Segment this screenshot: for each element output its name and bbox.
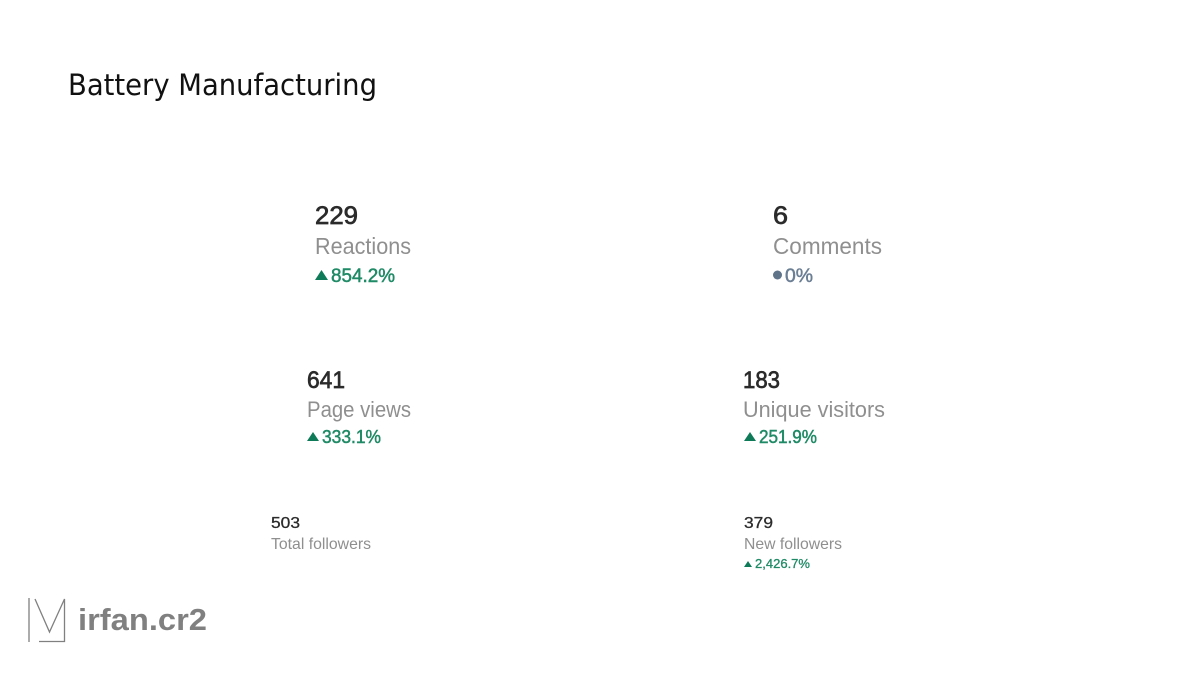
metric: total followers xyxy=(271,515,371,553)
metric: reactions: Reactions xyxy=(315,233,411,259)
metric: reactions: 854.2% xyxy=(331,266,395,287)
metric: total followers: Total followers xyxy=(271,536,371,553)
metric: comments: Comments xyxy=(773,233,882,259)
metric: new followers: 2,426.7% xyxy=(755,556,810,571)
logo: irfan.cr2 xyxy=(29,598,207,642)
metric: reactions xyxy=(315,202,411,287)
metric: page views: 641 xyxy=(307,367,345,394)
metric: page views: 333.1% xyxy=(322,427,381,447)
metric: unique visitors xyxy=(743,367,885,447)
metric: total followers: 503 xyxy=(271,515,300,532)
metric: unique visitors: 183 xyxy=(743,367,780,394)
metric: unique visitors: 251.9% xyxy=(759,427,817,447)
metric: new followers xyxy=(744,515,842,571)
metric: reactions: 229 xyxy=(315,202,358,230)
title: Battery Manufacturing xyxy=(68,68,377,102)
metric: new followers: New followers xyxy=(744,536,842,553)
metric: new followers: 379 xyxy=(744,515,773,532)
logo wordmark: irfan.cr2 xyxy=(78,602,207,637)
metric: comments: 6 xyxy=(773,202,788,230)
metric: page views xyxy=(307,367,411,447)
metric: unique visitors: Unique visitors xyxy=(743,397,885,422)
metric: page views: Page views xyxy=(307,397,411,422)
metric: comments: 0% xyxy=(785,266,813,287)
icon: M monogram xyxy=(29,598,64,642)
metric: comments xyxy=(773,202,882,287)
